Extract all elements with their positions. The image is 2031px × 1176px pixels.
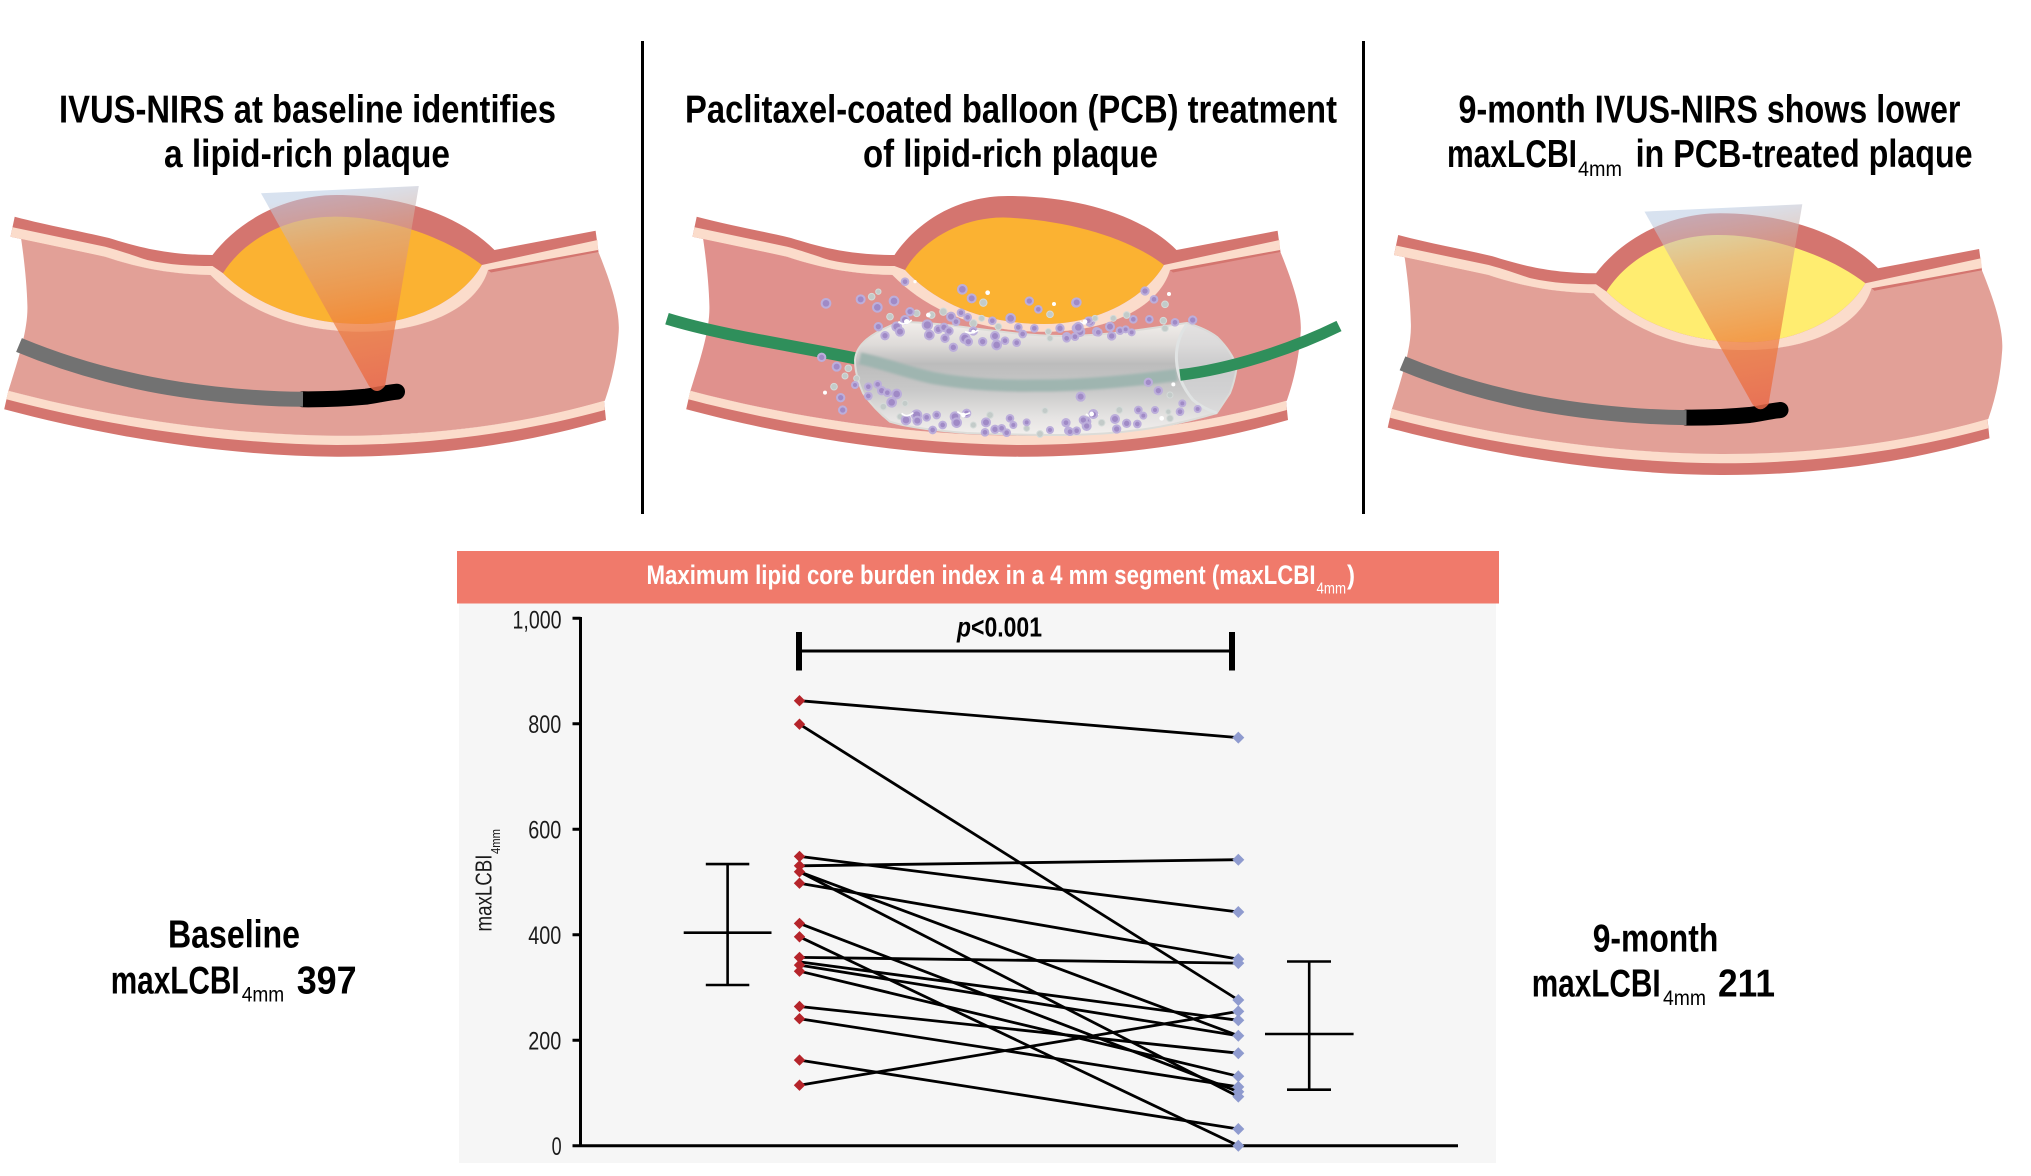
y axis title: maxLCBI: [470, 854, 496, 932]
chart header banner: Maximum lipid core burden index in a 4 mm segment (maxLCBI: [646, 560, 1316, 590]
title: IVUS-NIRS at baseline: [59, 89, 556, 176]
label: baseline maxLCBI: [111, 914, 357, 1007]
y axis tick labels: 800: [528, 711, 561, 739]
title: 9-month IVUS-NIRS: maxLCBI: [1447, 133, 1577, 176]
y axis tick labels: 0: [552, 1133, 562, 1161]
chart header banner: ): [1347, 560, 1355, 590]
title: PCB treatment: Paclitaxel-coated balloon (PCB) treatment: [685, 89, 1337, 132]
label: baseline maxLCBI: Baseline: [168, 914, 300, 957]
label: baseline maxLCBI: 397: [297, 959, 357, 1002]
illustration: 9-month artery with IVUS-NIRS catheter: [1388, 204, 2002, 475]
y axis tick labels: 400: [528, 922, 561, 950]
label: 9-month maxLCBI: 4mm: [1663, 987, 1706, 1010]
title: IVUS-NIRS at baseline: IVUS-NIRS at baseline identifies: [59, 89, 556, 132]
chart header banner: [457, 551, 1499, 604]
title: PCB treatment: [685, 89, 1337, 176]
illustration: baseline artery with IVUS-NIRS catheter: [4, 186, 619, 457]
y axis tick labels: [512, 606, 562, 1161]
label: 9-month maxLCBI: 9-month: [1593, 918, 1718, 961]
title: 9-month IVUS-NIRS: in PCB-treated plaque: [1636, 133, 1973, 176]
title: 9-month IVUS-NIRS: 4mm: [1578, 158, 1622, 181]
y axis title: 4mm: [488, 829, 503, 854]
significance bracket: [796, 612, 1235, 670]
9-month data points: [1232, 732, 1244, 1152]
label: baseline maxLCBI: 4mm: [242, 984, 284, 1007]
baseline data points: [794, 695, 805, 1091]
label: baseline maxLCBI: maxLCBI: [111, 959, 240, 1002]
y axis tick labels: 1,000: [512, 606, 562, 634]
significance bracket: p<0.001: [956, 612, 1042, 642]
divider: right: [1362, 41, 1365, 514]
title: PCB treatment: of lipid-rich plaque: [863, 133, 1158, 176]
y axis tick labels: 600: [528, 816, 561, 844]
label: 9-month maxLCBI: [1532, 918, 1775, 1010]
title: IVUS-NIRS at baseline: a lipid-rich plaque: [164, 133, 450, 176]
illustration: artery with paclitaxel-coated balloon: [667, 196, 1339, 457]
chart panel background: [459, 603, 1496, 1163]
chart header banner: 4mm: [1316, 580, 1346, 598]
divider: left: [641, 41, 644, 514]
y axis tick labels: 200: [528, 1028, 561, 1056]
9-month mean and SD bar: [1265, 962, 1354, 1090]
paired patient lines: [800, 701, 1238, 1146]
x axis: [572, 1144, 1458, 1147]
label: 9-month maxLCBI: maxLCBI: [1532, 963, 1661, 1006]
baseline mean and SD bar: [684, 864, 772, 985]
label: 9-month maxLCBI: 211: [1718, 963, 1775, 1006]
y axis with ticks: [572, 617, 580, 1147]
title: 9-month IVUS-NIRS: [1447, 89, 1973, 181]
